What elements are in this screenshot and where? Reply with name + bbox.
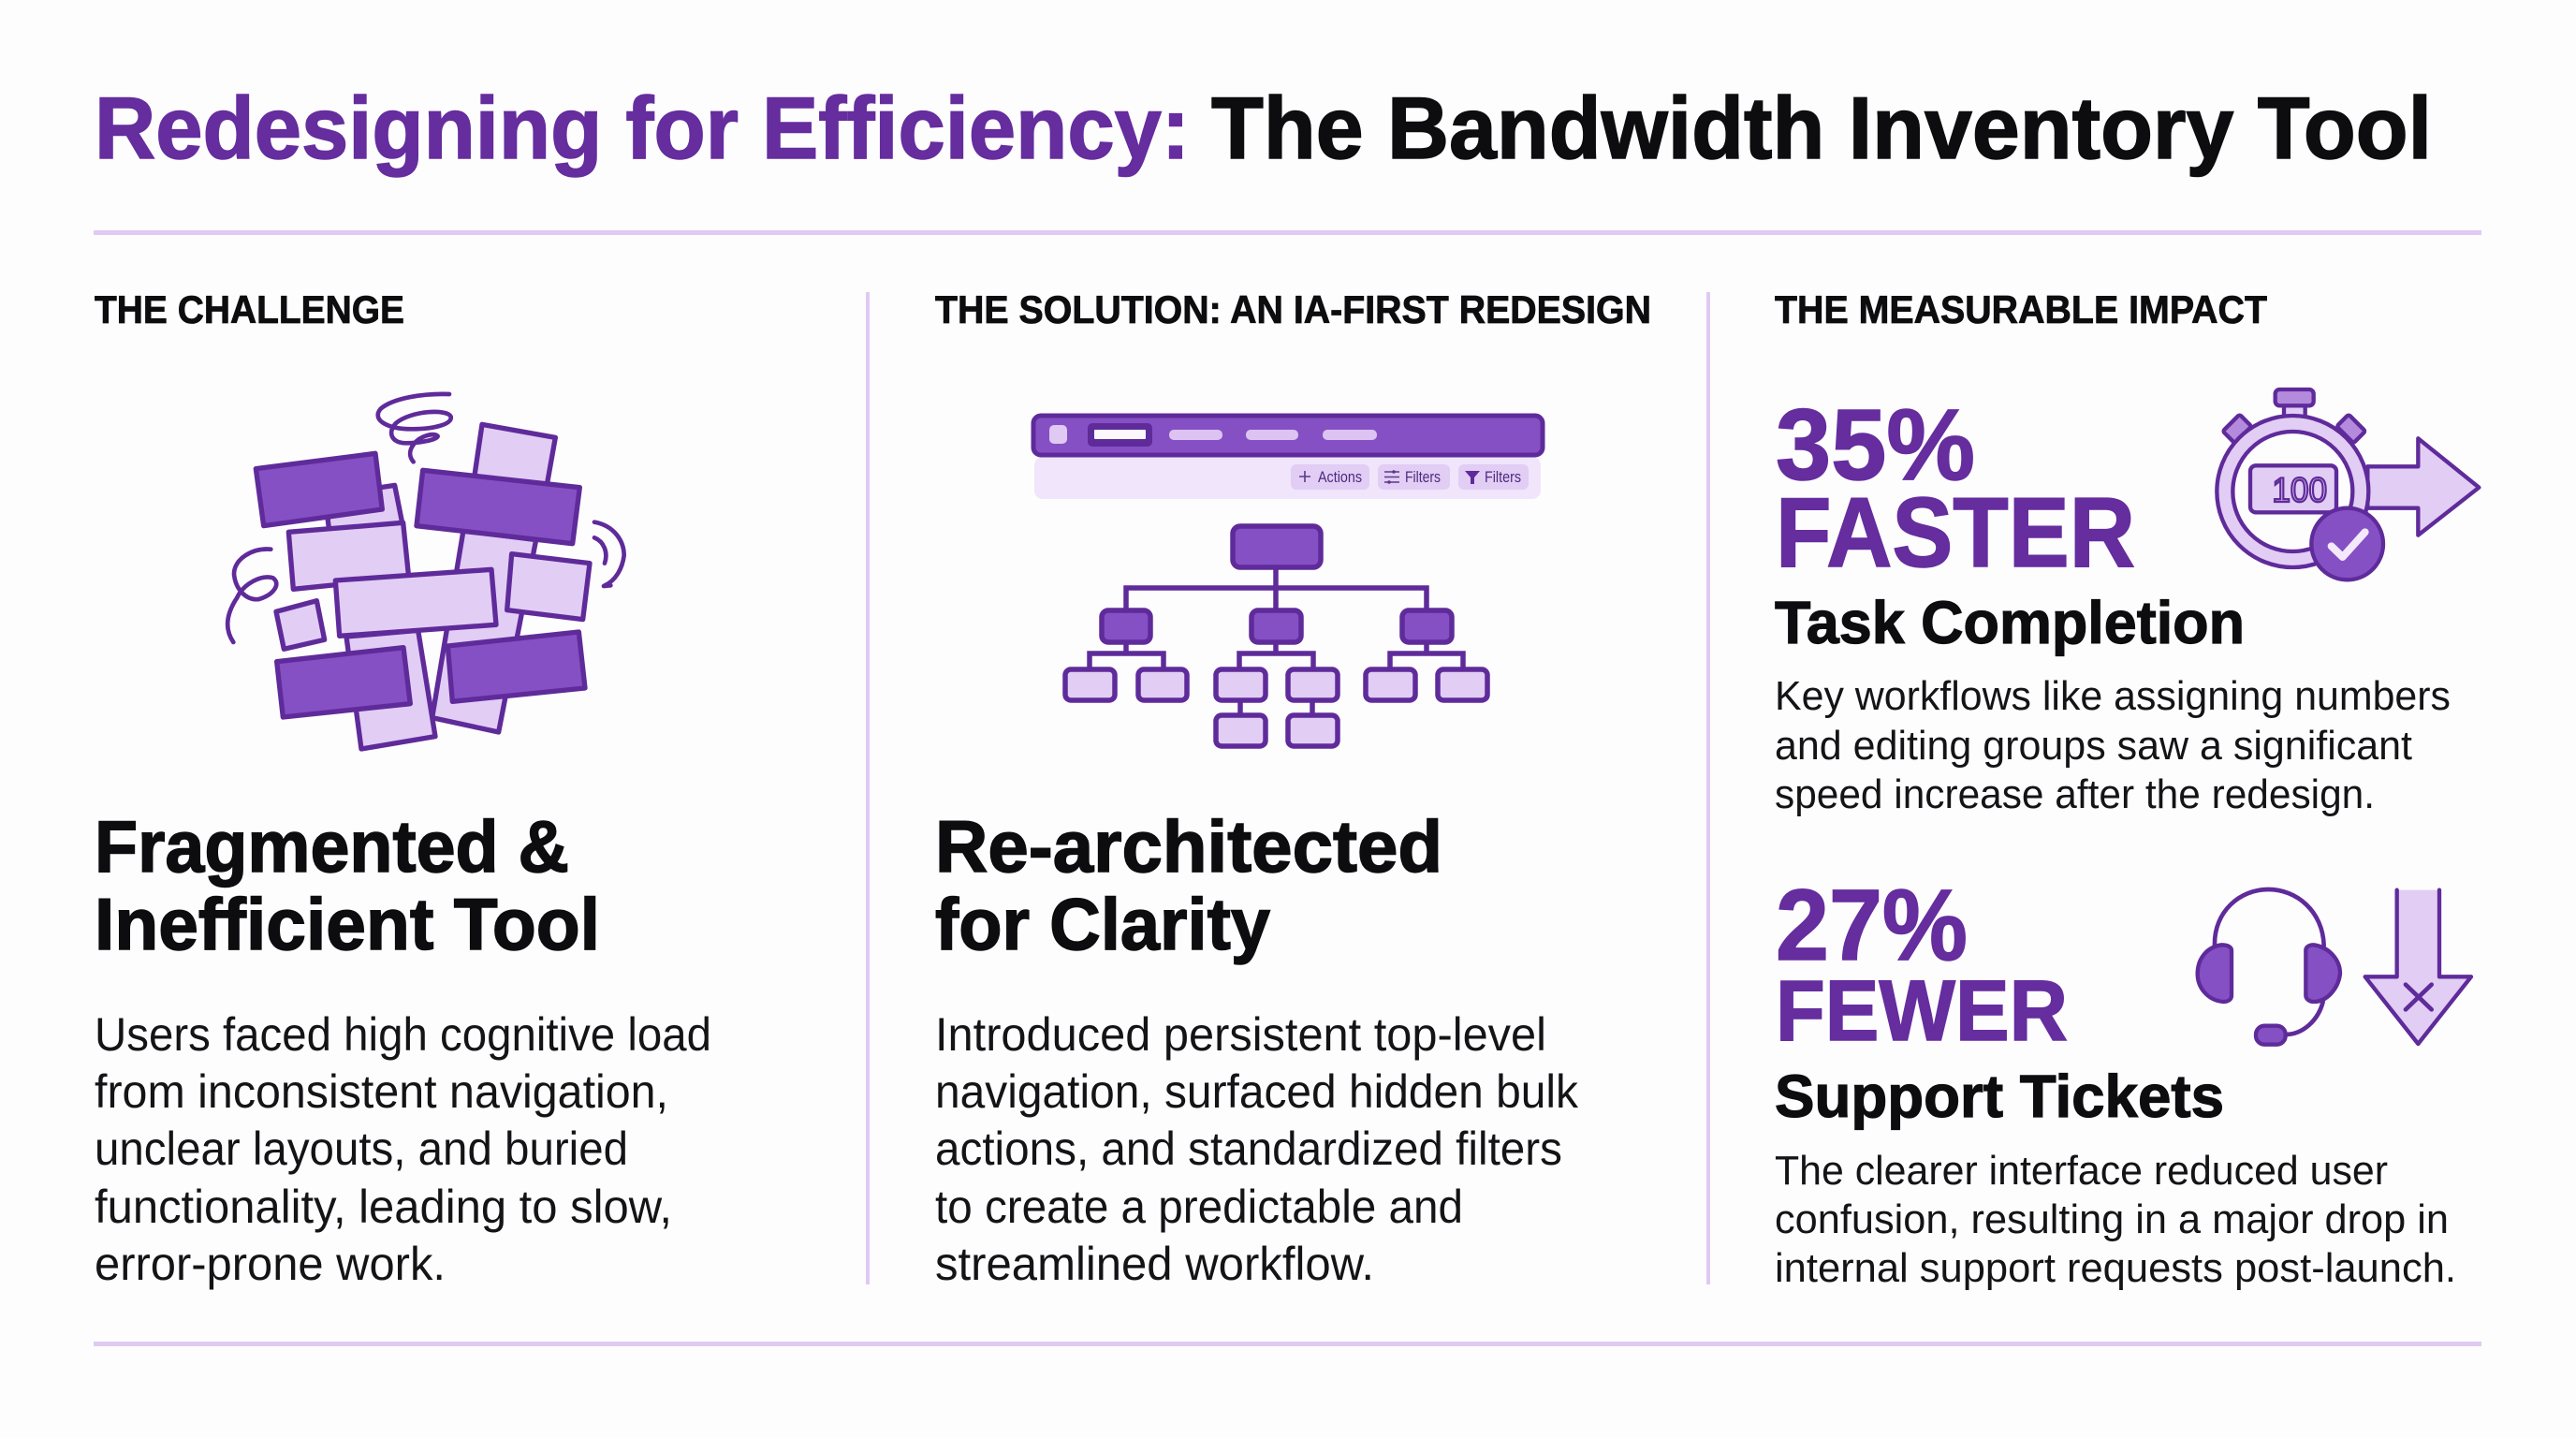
heading: fragmented and inefficient tool — [95, 805, 600, 965]
body text: solution description: Introduced persistent top-level — [935, 1008, 1546, 1061]
body text: challenge description: Users faced high cognitive load — [95, 1008, 711, 1061]
body text: challenge description — [95, 1008, 711, 1290]
metric: 35% faster — [1776, 388, 2135, 588]
metric: 35% faster: FASTER — [1776, 477, 2135, 588]
panel: the solution — [935, 287, 1651, 1290]
body text: support tickets description: internal support requests post-launch. — [1775, 1245, 2456, 1291]
icon: down arrow with x — [2365, 890, 2471, 1044]
title: The Bandwidth Inventory Tool — [1211, 79, 2432, 177]
illustration: information architecture tree — [1065, 526, 1487, 746]
panel: the measurable impact — [1775, 287, 2479, 1291]
metric: 27% fewer: 27% — [1776, 868, 1968, 981]
heading: fragmented and inefficient tool: Inefficient Tool — [95, 883, 600, 965]
subheading: task completion: Task Completion — [1775, 589, 2245, 656]
metric: 27% fewer — [1776, 868, 2068, 1059]
body text: task completion description: and editing groups saw a significant — [1775, 723, 2412, 769]
body text: solution description: navigation, surfaced hidden bulk — [935, 1065, 1579, 1118]
illustration: scattered fragmented blocks — [227, 394, 624, 749]
body text: task completion description: speed increase after the redesign. — [1775, 771, 2375, 817]
body text: task completion description — [1775, 673, 2451, 817]
body text: solution description: to create a predictable and — [935, 1181, 1463, 1233]
body text: challenge description: error-prone work. — [95, 1238, 446, 1290]
metric: 35% faster: 35% — [1776, 388, 1975, 501]
body text: solution description: streamlined workflow. — [935, 1238, 1374, 1290]
section label: the challenge: THE CHALLENGE — [95, 287, 404, 331]
title — [95, 79, 2432, 177]
button: filters with sliders: Filters — [1405, 468, 1441, 486]
button: filters with sliders — [1378, 464, 1450, 490]
body text: challenge description: from inconsistent navigation, — [95, 1065, 668, 1118]
icon: stopwatch with arrow and check — [2217, 389, 2479, 580]
button: filters with funnel: Filters — [1485, 468, 1521, 486]
body text: solution description — [935, 1008, 1579, 1290]
heading: re-architected for clarity — [935, 805, 1442, 965]
body text: support tickets description: The clearer interface reduced user — [1775, 1148, 2388, 1194]
heading: fragmented and inefficient tool: Fragmented & — [95, 805, 569, 888]
heading: re-architected for clarity: for Clarity — [935, 883, 1270, 965]
icon: headset — [2198, 889, 2340, 1045]
section label: the measurable impact: THE MEASURABLE IMPACT — [1775, 287, 2267, 331]
body text: challenge description: functionality, leading to slow, — [95, 1181, 672, 1233]
panel: the challenge — [95, 287, 711, 1290]
metric: 27% fewer: FEWER — [1776, 963, 2068, 1059]
body text: support tickets description — [1775, 1148, 2456, 1291]
button: filters with funnel — [1458, 464, 1529, 490]
subheading: support tickets: Support Tickets — [1775, 1063, 2224, 1130]
body text: challenge description: unclear layouts, and buried — [95, 1123, 628, 1175]
body text: solution description: actions, and standardized filters — [935, 1123, 1562, 1175]
illustration: navigation bar with actions and filters — [1033, 416, 1543, 499]
title: Redesigning for Efficiency: — [95, 79, 1190, 177]
heading: re-architected for clarity: Re-architected — [935, 805, 1442, 888]
button: actions — [1291, 464, 1369, 490]
section label: the solution: THE SOLUTION: AN IA-FIRST REDESIGN — [935, 287, 1651, 331]
body text: support tickets description: confusion, resulting in a major drop in — [1775, 1196, 2449, 1242]
button: actions: Actions — [1318, 468, 1362, 486]
body text: task completion description: Key workflows like assigning numbers — [1775, 673, 2451, 719]
icon: stopwatch with arrow and check: 100 — [2272, 470, 2327, 509]
